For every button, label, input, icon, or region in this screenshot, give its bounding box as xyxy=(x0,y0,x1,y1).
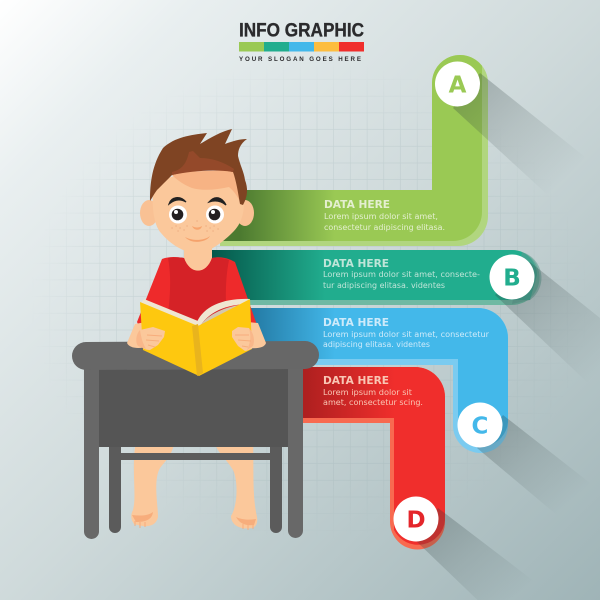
book cover xyxy=(140,299,252,376)
slogan: YOUR SLOGAN GOES HERE xyxy=(239,56,361,63)
badge A: A xyxy=(449,72,467,98)
nose xyxy=(192,226,202,230)
desk top xyxy=(72,341,319,370)
desk xyxy=(72,341,319,539)
arms xyxy=(127,322,266,348)
forehead shadow xyxy=(172,170,241,204)
face xyxy=(153,173,244,253)
text C: adipiscing elitasa. videntes xyxy=(323,340,430,349)
long shadow B xyxy=(495,262,600,385)
text D: DATA HERE xyxy=(323,375,389,387)
long shadow A xyxy=(453,73,585,198)
boy reading at desk xyxy=(72,129,319,539)
neck xyxy=(184,240,212,275)
text A: Lorem ipsum dolor sit amet, xyxy=(324,212,438,221)
text A: consectetur adipiscing elitasa. xyxy=(324,223,445,232)
freckles xyxy=(172,221,218,231)
hands xyxy=(136,327,255,351)
ribbon B xyxy=(205,250,600,385)
badge B: B xyxy=(503,266,521,292)
badge D xyxy=(394,496,438,542)
text B: tur adipiscing elitasa. videntes xyxy=(323,281,445,290)
crossbar xyxy=(121,453,270,460)
badge D: D xyxy=(406,508,426,534)
long shadow D xyxy=(415,508,535,600)
badge B xyxy=(490,254,534,300)
text C: DATA HERE xyxy=(323,317,389,329)
badge C: C xyxy=(472,414,488,440)
hair xyxy=(150,129,247,205)
title block xyxy=(239,20,364,63)
text A: DATA HERE xyxy=(324,199,390,211)
text D xyxy=(323,375,423,407)
text B xyxy=(323,258,480,290)
left brow xyxy=(169,198,186,204)
ribbon A xyxy=(220,55,585,246)
front panel xyxy=(99,368,289,447)
text A xyxy=(324,199,445,232)
long shadow C xyxy=(477,415,590,516)
back legs xyxy=(109,440,282,533)
pages of open book xyxy=(140,299,250,328)
ribbon C xyxy=(240,308,590,516)
text B: DATA HERE xyxy=(323,258,389,270)
ears xyxy=(140,200,254,226)
text D: amet, consectetur scing. xyxy=(323,398,423,407)
front legs xyxy=(84,360,303,539)
badge C xyxy=(458,402,502,448)
left eye xyxy=(169,206,187,224)
right brow xyxy=(209,198,226,205)
text C: Lorem ipsum dolor sit amet, consectetur xyxy=(323,330,490,339)
shirt xyxy=(137,257,258,335)
head xyxy=(140,129,254,253)
title: INFO GRAPHIC xyxy=(239,20,364,42)
text C xyxy=(323,317,490,349)
colour bar xyxy=(239,42,364,52)
text D: Lorem ipsum dolor sit xyxy=(323,388,412,397)
right eye xyxy=(206,206,224,224)
legs xyxy=(131,440,257,530)
ribbon D xyxy=(296,367,535,600)
badge A xyxy=(435,62,480,106)
text B: Lorem ipsum dolor sit amet, consecte- xyxy=(323,270,480,279)
mouth xyxy=(185,236,210,242)
